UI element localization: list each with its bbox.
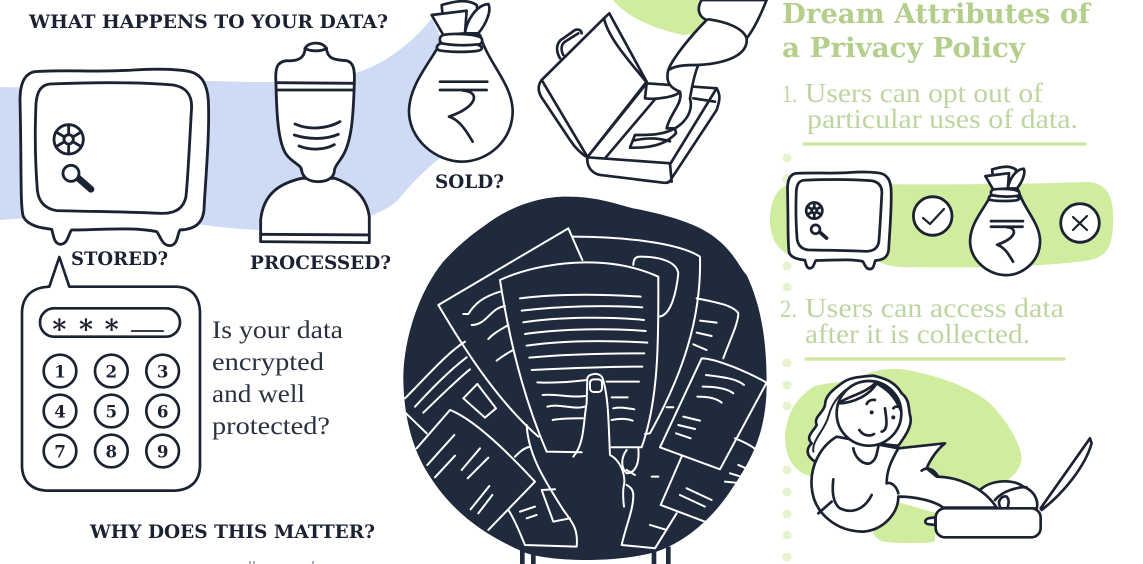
heading: what happens to your data: WHAT HAPPENS TO YOUR DATA? — [28, 11, 388, 33]
text: encryption question: and well — [212, 381, 305, 408]
attribute 2 text — [780, 293, 1064, 349]
number keys: 4 — [54, 401, 66, 421]
number keys: 1 — [54, 361, 66, 381]
underline — [806, 357, 1064, 361]
number keys: 2 — [106, 361, 117, 381]
label: processed: PROCESSED? — [250, 252, 391, 274]
text: encryption question: protected? — [212, 413, 330, 440]
briefcase — [925, 438, 1092, 537]
icon: cross — [1061, 204, 1099, 242]
number keys: 9 — [157, 441, 168, 461]
illustration: woman reading beside briefcase — [785, 369, 1092, 543]
attribute 2 text: after it is collected. — [805, 319, 1030, 349]
password display: * — [105, 315, 119, 346]
icon: safe — [20, 69, 209, 246]
heading: dream attributes — [782, 0, 1092, 64]
attribute 2 text: 2. — [780, 296, 797, 323]
pointing hand — [508, 374, 677, 548]
label: stored: STORED? — [71, 248, 168, 270]
illustration: hand on documents in dark circle — [403, 197, 767, 564]
attribute 1 text: 1. — [782, 81, 797, 108]
main document — [500, 262, 658, 452]
icon: small money bag — [970, 167, 1040, 275]
surrounding documents — [405, 228, 767, 530]
text: encryption question — [212, 317, 343, 440]
attribute 1 text — [782, 78, 1078, 134]
label: sold: SOLD? — [435, 171, 504, 193]
hair — [808, 376, 911, 462]
panel: opt out choices — [770, 167, 1113, 275]
icon: briefcase with paper — [539, 0, 767, 183]
heading: why does this matter: WHY DOES THIS MATTER? — [89, 521, 375, 543]
password display — [40, 308, 180, 346]
password display: * — [52, 315, 66, 346]
attribute 1 text: particular uses of data. — [807, 104, 1078, 134]
number keys: 8 — [106, 441, 117, 461]
head — [837, 381, 901, 446]
number keys: 7 — [54, 441, 66, 461]
icon: check — [913, 197, 952, 235]
attribute 2 text: Users can access data — [805, 293, 1064, 323]
attribute 1 text: Users can opt out of — [805, 78, 1043, 108]
number keys — [44, 355, 179, 467]
heading: dream attributes: a Privacy Policy — [782, 33, 1026, 64]
number keys: 5 — [106, 401, 117, 421]
icon: processing machine — [261, 43, 369, 243]
background blob: green top — [613, 0, 730, 35]
background blob: blue — [0, 18, 450, 230]
body — [811, 437, 997, 532]
dotted divider — [782, 154, 792, 562]
password display: * — [79, 315, 93, 346]
icon: small safe — [787, 172, 891, 269]
number keys: 3 — [157, 361, 168, 381]
speech bubble keypad — [22, 257, 200, 491]
text: encryption question: encrypted — [212, 349, 325, 376]
text: encryption question: Is your data — [212, 317, 343, 344]
number keys: 6 — [157, 401, 168, 421]
icon: money bag — [409, 1, 513, 162]
underline — [804, 142, 1085, 146]
green blob — [785, 369, 1022, 543]
